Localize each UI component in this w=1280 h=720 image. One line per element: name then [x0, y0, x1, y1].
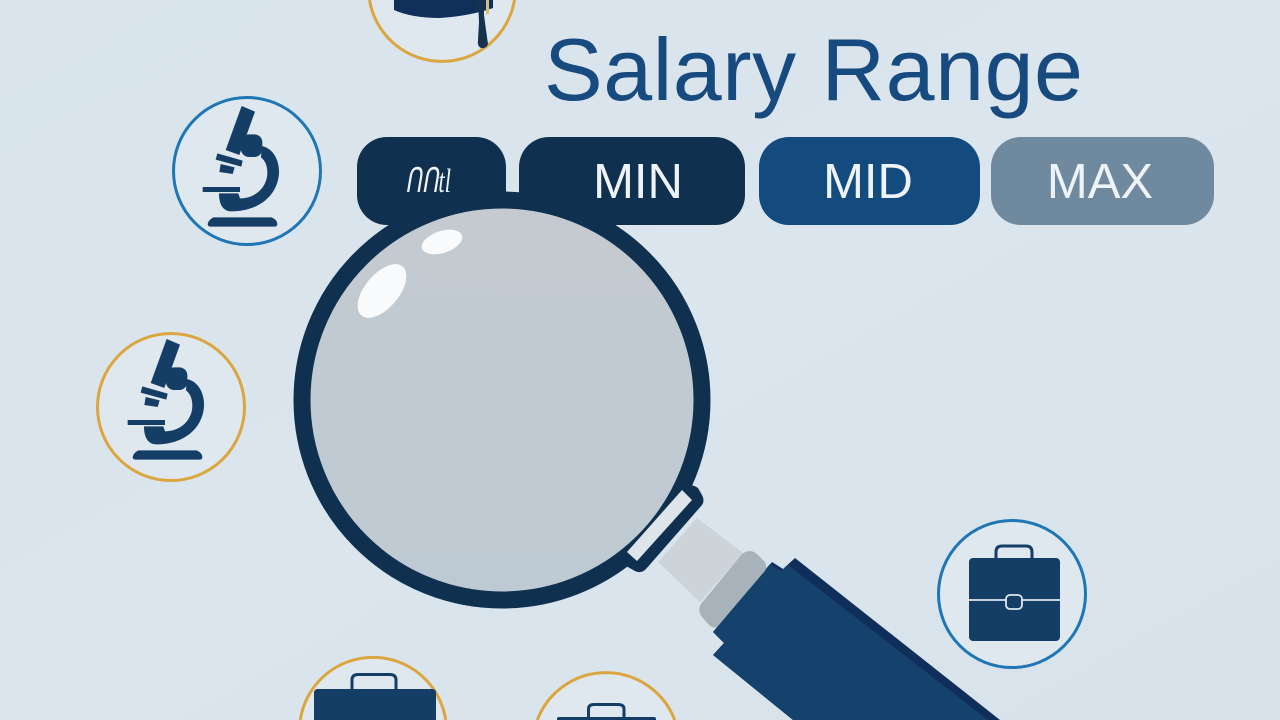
pill: unlabeled glyph	[357, 137, 506, 225]
magnifier ring and lens	[302, 200, 702, 600]
icon: briefcase in gold circle, bottom centre	[537, 673, 675, 720]
icon: microscope in gold circle	[98, 334, 244, 480]
pill: MAX: MAX	[1047, 155, 1153, 209]
bracket window	[627, 490, 692, 561]
pill: MID: MID	[823, 155, 913, 209]
magnifier neck	[658, 518, 743, 602]
icon: briefcase in blue circle	[938, 520, 1086, 668]
pill: MAX	[991, 137, 1214, 225]
magnifier bracket	[626, 485, 704, 572]
title: Salary Range	[544, 20, 1083, 119]
pill: MIN	[519, 137, 745, 225]
icon: briefcase in gold circle, bottom left	[300, 657, 446, 720]
lens highlights	[348, 225, 465, 326]
pill: MIN: MIN	[593, 155, 683, 209]
pill: unlabeled glyph: ՈՈtl	[405, 163, 451, 200]
magnifier collar	[699, 551, 766, 628]
icon: graduation cap in gold circle	[370, 0, 514, 61]
magnifier handle	[713, 558, 1000, 720]
magnifying glass	[302, 200, 1000, 720]
icon: microscope in blue circle	[174, 98, 320, 244]
pill: MID	[759, 137, 980, 225]
